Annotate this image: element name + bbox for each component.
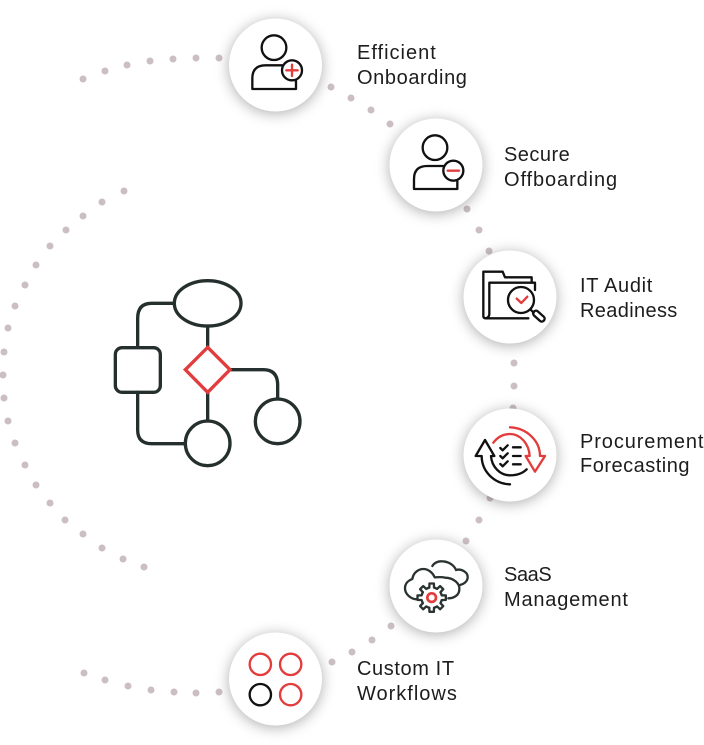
label: Efficient Onboarding: Efficient [357,42,437,64]
label: Custom IT Workflows: Custom IT [357,658,455,680]
icon: four circles [250,654,301,705]
icon: user with plus [252,35,302,89]
panel: Procurement Forecasting [464,408,704,504]
label: IT Audit Readiness: IT Audit [580,275,653,297]
label: Secure Offboarding: Secure [504,144,570,166]
panel: SaaS Management [390,540,629,634]
dotted inner arc [0,188,148,570]
icon: clouds with gear [405,561,468,612]
panel: Secure Offboarding [390,118,618,214]
label: Efficient Onboarding: Onboarding [357,67,468,89]
panel: Efficient Onboarding [229,18,468,114]
dotted outer arc [80,54,518,696]
icon: folder with magnifier [483,272,546,323]
label: Procurement Forecasting: Procurement [580,431,704,453]
icon: forecasting cycle [476,427,545,484]
label: IT Audit Readiness: Readiness [580,300,678,322]
label: Custom IT Workflows: Workflows [357,683,458,705]
panel: IT Audit Readiness [464,250,678,346]
central flowchart icon [115,281,300,466]
icon: user with minus [414,135,463,189]
panel: Custom IT Workflows [229,632,458,728]
label: Procurement Forecasting: Forecasting [580,455,690,477]
label: SaaS Management: SaaS [504,564,551,586]
label: Secure Offboarding: Offboarding [504,169,618,191]
label: SaaS Management: Management [504,589,629,611]
